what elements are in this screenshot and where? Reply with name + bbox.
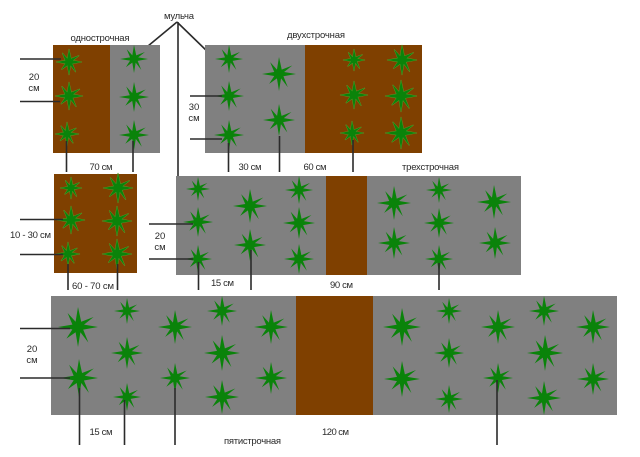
bed: small brown bed without mulch: 60 - 70 см	[72, 281, 114, 292]
bed: однострочная: однострочная	[70, 33, 130, 44]
bed: двухстрочная: 30 см	[238, 162, 262, 173]
bed: small brown bed without mulch: 10 - 30 см	[10, 230, 51, 241]
bed: двухстрочная: 60 см	[304, 162, 326, 173]
bed: трехстрочная: 90 см	[330, 280, 353, 291]
label: мульча: мульча	[164, 11, 195, 22]
bed: однострочная: 70 см	[90, 162, 112, 173]
bed: пятистрочная: 120 см	[322, 427, 349, 438]
bed: однострочная: 20	[29, 72, 39, 83]
bed: трехстрочная: 15 см	[211, 278, 234, 289]
bed: двухстрочная: двухстрочная	[287, 30, 345, 41]
bed: однострочная: см	[28, 83, 40, 94]
bed: пятистрочная	[20, 296, 617, 447]
bed: пятистрочная: 15 см	[90, 427, 112, 438]
bed: small brown bed without mulch	[10, 173, 137, 292]
bed: трехстрочная	[149, 162, 521, 291]
bed: однострочная	[20, 33, 160, 173]
bed: трехстрочная: трехстрочная	[402, 162, 459, 173]
bed: трехстрочная: 20	[155, 231, 165, 242]
bed: двухстрочная: см	[188, 113, 200, 124]
bed: пятистрочная: см	[26, 355, 38, 366]
bed: пятистрочная: пятистрочная	[224, 436, 281, 447]
bed: пятистрочная: 20	[27, 344, 37, 355]
bed: двухстрочная	[188, 30, 422, 173]
arrows: mulch pointers	[142, 22, 210, 189]
bed: трехстрочная: см	[154, 242, 166, 253]
bed: двухстрочная: 30	[189, 102, 199, 113]
